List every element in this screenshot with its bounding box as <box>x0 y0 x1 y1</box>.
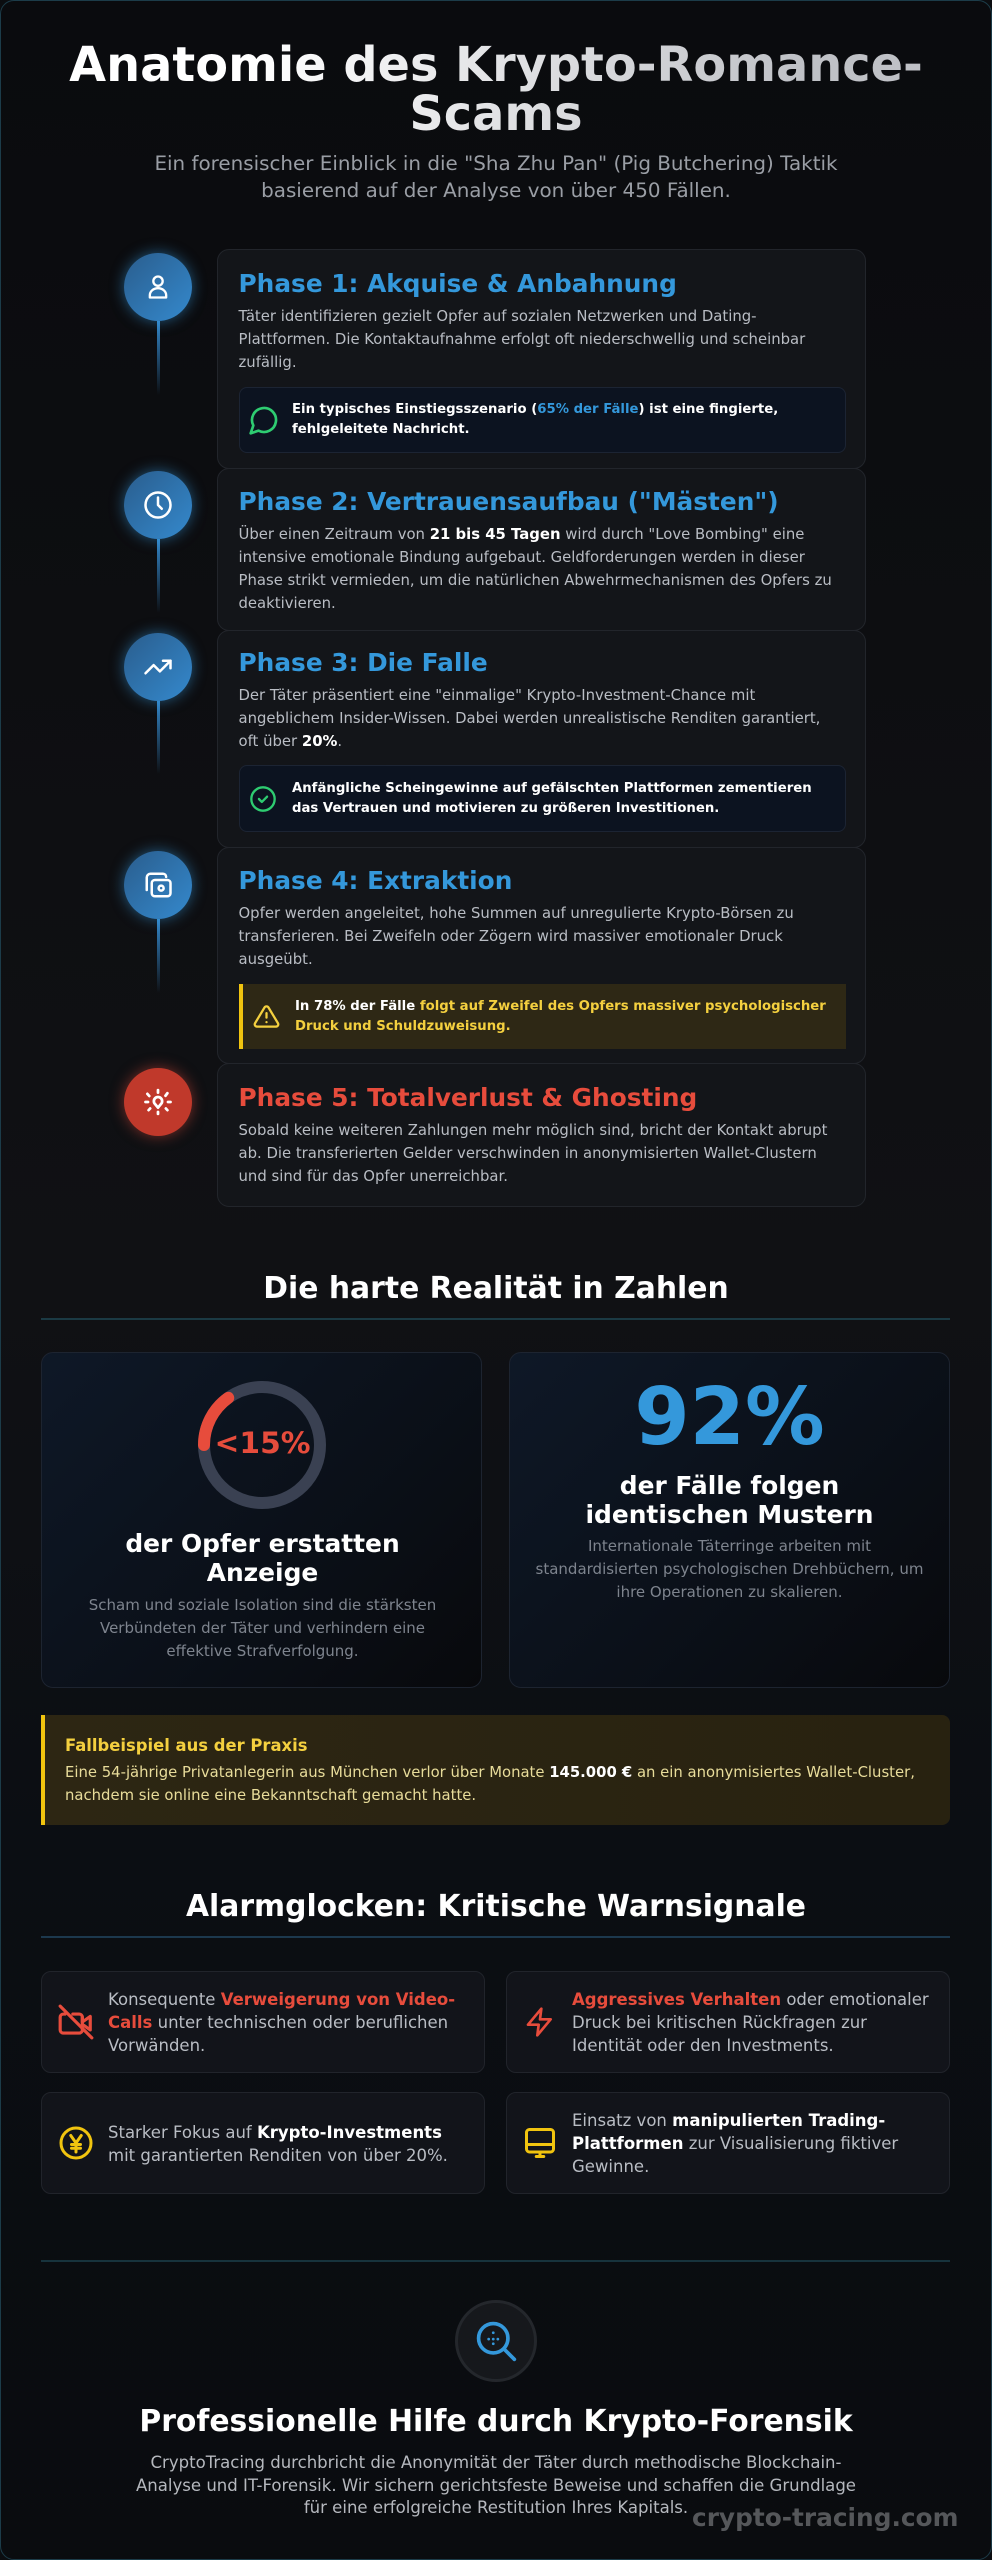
stat title: Anzeige <box>207 1558 318 1587</box>
warning text: Calls unter technischen oder beruflichen <box>108 2013 448 2032</box>
callout text phase 1: Ein typisches Einstiegsszenario (65% der Fälle) ist eine fingierte, <box>292 402 778 417</box>
stat title <box>585 1471 874 1529</box>
big number: 92% <box>634 1370 825 1463</box>
icon: phase 3 trend <box>124 633 192 701</box>
phase 2 text: Phase strikt vermieden, um die natürlichen Abwehrmechanismen des Opfers zu <box>238 571 832 589</box>
icon: phase 2 clock <box>124 471 192 539</box>
phase 5 text <box>238 1121 828 1185</box>
connector line phase 4 <box>156 919 160 993</box>
icon: warning <box>254 1005 280 1028</box>
phase 4 text: transferieren. Bei Zweifeln oder Zögern wird massiver emotionaler Druck <box>238 927 783 945</box>
icon: monitor <box>525 2128 555 2158</box>
connector line phase 2 <box>156 539 160 613</box>
callout: phase 3 <box>239 765 846 832</box>
icon: video off <box>58 2004 94 2040</box>
stat description: effektive Strafverfolgung. <box>166 1642 359 1660</box>
phase 4 heading: Phase 4: Extraktion <box>238 866 512 895</box>
phase 1 text <box>238 307 806 371</box>
icon: yen coin <box>60 2126 92 2160</box>
connector line phase 3 <box>156 700 160 774</box>
panel: stat under 15 percent <box>41 1352 482 1688</box>
warning text <box>572 2111 898 2176</box>
phase 3 heading: Phase 3: Die Falle <box>238 648 488 677</box>
case study text: nachdem sie online eine Bekanntschaft gemacht hatte. <box>65 1787 476 1804</box>
case study text <box>65 1764 915 1804</box>
panel: warning aggressive behaviour <box>506 1971 950 2073</box>
title: Anatomie des Krypto-Romance- <box>69 38 923 93</box>
alert text: Druck und Schuldzuweisung. <box>295 1018 511 1034</box>
section heading: warning signs: Alarmglocken: Kritische Warnsignale <box>186 1889 806 1924</box>
callout: phase 1 <box>239 387 846 453</box>
icon: forensic magnifier <box>455 2300 537 2382</box>
title <box>0 41 992 139</box>
phase 2 text: deaktivieren. <box>238 594 336 612</box>
phase 2 text: Über einen Zeitraum von 21 bis 45 Tagen wird durch "Love Bombing" eine <box>238 525 804 543</box>
phase 1 text: Täter identifizieren gezielt Opfer auf sozialen Netzwerken und Dating- <box>238 307 757 325</box>
subtitle <box>154 152 838 202</box>
phase 2 heading: Phase 2: Vertrauensaufbau ("Mästen") <box>238 487 779 516</box>
icon: phase 1 user <box>124 253 192 321</box>
stat description: standardisierten psychologischen Drehbüchern, um <box>536 1560 923 1578</box>
footer text: CryptoTracing durchbricht die Anonymität der Täter durch methodische Blockchain- <box>150 2453 842 2472</box>
watermark: crypto-tracing.com <box>692 2503 958 2532</box>
case study title: Fallbeispiel aus der Praxis <box>65 1736 307 1755</box>
panel: warning crypto focus <box>41 2092 485 2194</box>
callout: case study <box>41 1715 950 1825</box>
phase 4 text: Opfer werden angeleitet, hohe Summen auf unregulierte Krypto-Börsen zu <box>238 904 794 922</box>
warning text: Identität oder den Investments. <box>572 2036 834 2055</box>
stat description <box>536 1537 923 1601</box>
warning text <box>108 1990 455 2055</box>
callout text phase 3: Anfängliche Scheingewinne auf gefälschten Plattformen zementieren <box>292 781 812 796</box>
alert: phase 4 <box>239 984 846 1049</box>
phase 5 text: und sind für das Opfer unerreichbar. <box>238 1167 508 1185</box>
subtitle: Ein forensischer Einblick in die "Sha Zhu Pan" (Pig Butchering) Taktik <box>154 152 838 175</box>
icon: phase 4 banknotes <box>124 851 192 919</box>
panel: phase 2 card <box>217 468 866 631</box>
phase 1 text: zufällig. <box>238 353 297 371</box>
connector line phase 1 <box>156 321 160 395</box>
footer text <box>136 2453 856 2517</box>
phase 5 heading: Phase 5: Totalverlust & Ghosting <box>238 1083 697 1112</box>
ring value: <15% <box>215 1426 310 1461</box>
phase 2 text <box>238 525 832 612</box>
callout text phase 1 <box>292 402 778 436</box>
stat title: der Opfer erstatten <box>125 1529 400 1558</box>
phase 1 heading: Phase 1: Akquise & Anbahnung <box>238 269 677 298</box>
panel: phase 5 card <box>217 1063 866 1207</box>
alert text <box>295 999 826 1034</box>
callout text phase 3 <box>292 781 812 816</box>
warning text <box>572 1990 929 2055</box>
warning text: Einsatz von manipulierten Trading- <box>572 2111 885 2130</box>
stat title: identischen Mustern <box>585 1500 874 1529</box>
phase 4 text: ausgeübt. <box>238 950 313 968</box>
stat description: ihre Operationen zu skalieren. <box>616 1583 843 1601</box>
phase 3 text: oft über 20%. <box>238 732 342 750</box>
callout text phase 1: fehlgeleitete Nachricht. <box>292 422 470 436</box>
warning text: Konsequente Verweigerung von Video- <box>108 1990 455 2009</box>
phase 2 text: intensive emotionale Bindung aufgebaut. Geldforderungen werden in dieser <box>238 548 805 566</box>
icon: message <box>249 406 278 435</box>
stat description: Verbündeten der Täter und verhindern eine <box>100 1619 425 1637</box>
footer text: Analyse und IT-Forensik. Wir sichern gerichtsfeste Beweise und schaffen die Grundlage <box>136 2476 856 2495</box>
warning text <box>108 2123 448 2165</box>
stat title: der Fälle folgen <box>620 1471 839 1500</box>
ring chart <box>198 1381 326 1509</box>
phase 4 text <box>238 904 794 968</box>
footer heading: Professionelle Hilfe durch Krypto-Forensik <box>139 2404 853 2439</box>
panel: phase 3 card <box>217 630 866 848</box>
phase 3 text: angeblichem Insider-Wissen. Dabei werden unrealistische Renditen garantiert, <box>238 709 820 727</box>
panel: stat 92 percent <box>509 1352 950 1688</box>
warning text: Plattformen zur Visualisierung fiktiver <box>572 2134 898 2153</box>
stat description: Scham und soziale Isolation sind die stärksten <box>89 1596 436 1614</box>
icon: zap <box>526 2007 552 2037</box>
warning text: Starker Fokus auf Krypto-Investments <box>108 2123 442 2142</box>
section heading: stats: Die harte Realität in Zahlen <box>263 1271 729 1306</box>
footer text: für eine erfolgreiche Restitution Ihres Kapitals. <box>304 2498 688 2517</box>
alert text: In 78% der Fälle folgt auf Zweifel des Opfers massiver psychologischer <box>295 999 826 1014</box>
stat description: Internationale Täterringe arbeiten mit <box>588 1537 871 1555</box>
phase 3 text: Der Täter präsentiert eine "einmalige" Krypto-Investment-Chance mit <box>238 686 755 704</box>
phase 5 text: Sobald keine weiteren Zahlungen mehr möglich sind, bricht der Kontakt abrupt <box>238 1121 827 1139</box>
warning text: Druck bei kritischen Rückfragen zur <box>572 2013 867 2032</box>
icon: phase 5 ghost burst <box>124 1068 192 1136</box>
panel: warning video calls <box>41 1971 485 2073</box>
stat title <box>125 1529 400 1587</box>
title: Scams <box>409 87 583 142</box>
phase 1 text: Plattformen. Die Kontaktaufnahme erfolgt oft niederschwellig und scheinbar <box>238 330 805 348</box>
warning text: mit garantierten Renditen von über 20%. <box>108 2146 448 2165</box>
phase 3 text <box>238 686 820 750</box>
panel: phase 1 card <box>217 249 866 469</box>
warning text: Vorwänden. <box>108 2036 205 2055</box>
icon: check <box>250 786 276 812</box>
stat description <box>89 1596 436 1660</box>
callout text phase 3: das Vertrauen und motivieren zu größeren Investitionen. <box>292 800 719 816</box>
warning text: Aggressives Verhalten oder emotionaler <box>572 1990 929 2009</box>
panel: phase 4 card <box>217 847 866 1064</box>
phase 5 text: ab. Die transferierten Gelder verschwinden in anonymisierten Wallet-Clustern <box>238 1144 817 1162</box>
panel: warning trading platforms <box>506 2092 950 2194</box>
case study text: Eine 54-jährige Privatanlegerin aus München verlor über Monate 145.000 € an ein anonymisiertes Wallet-Cluster, <box>65 1764 915 1781</box>
subtitle: basierend auf der Analyse von über 450 Fällen. <box>261 179 731 202</box>
warning text: Gewinne. <box>572 2157 649 2176</box>
